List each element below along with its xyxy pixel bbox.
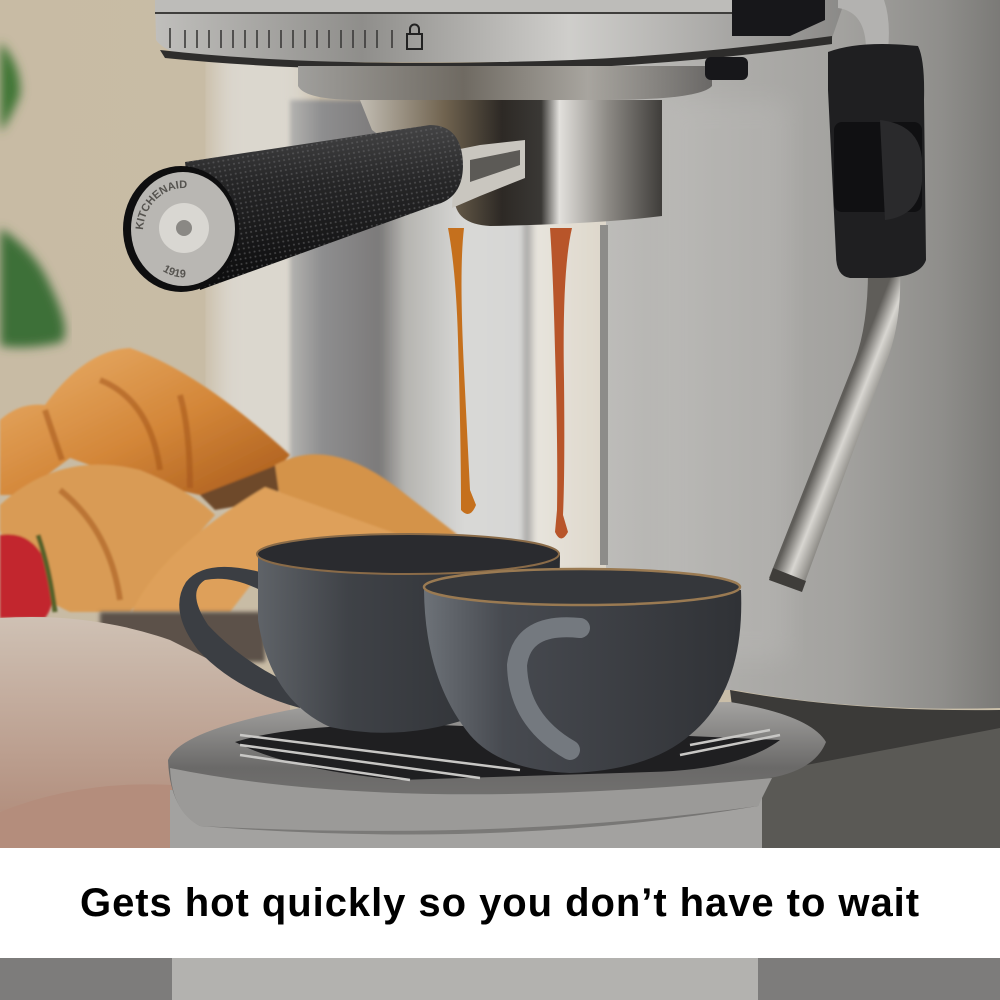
portafilter basket <box>360 100 662 226</box>
espresso streams <box>448 228 572 538</box>
steam wand grip <box>828 44 926 278</box>
caption: Gets hot quickly so you don’t have to wait <box>80 880 920 924</box>
steam wand <box>769 270 900 590</box>
brew head <box>155 0 889 100</box>
front cup <box>424 569 741 773</box>
cap engraving: 1919 <box>163 266 186 278</box>
cap engraving: KITCHENAID <box>136 180 187 230</box>
towel and plate <box>0 612 290 848</box>
scale ticks and lock icon <box>170 28 392 48</box>
lower strip below caption <box>0 958 1000 1000</box>
counter and drip tray <box>168 690 1000 848</box>
front cup handle <box>517 627 580 750</box>
machine body <box>600 0 1000 709</box>
blurred green plant <box>0 42 65 347</box>
wand tip <box>769 568 806 592</box>
caption <box>0 848 1000 958</box>
back cup <box>179 534 560 733</box>
cap engraving <box>136 180 187 278</box>
portafilter handle <box>123 125 525 292</box>
croissants <box>0 348 458 618</box>
